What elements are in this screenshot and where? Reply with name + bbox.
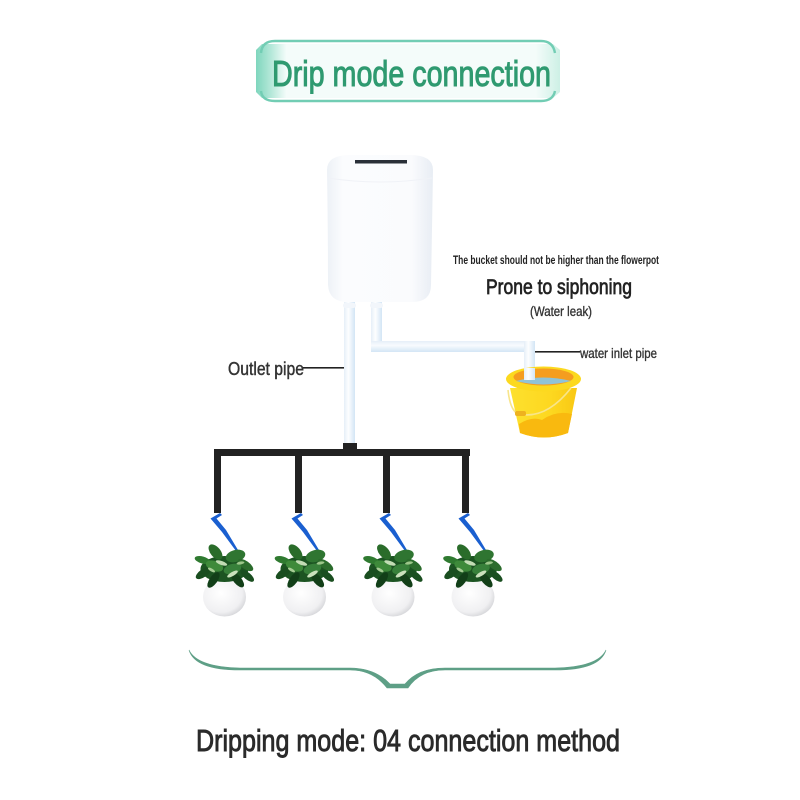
potted plant 2 [274, 542, 336, 616]
drip stake 3 [380, 513, 407, 551]
outlet pipe leader line [303, 367, 344, 369]
drip stake 4 [458, 513, 486, 551]
water leak note: (Water leak) [530, 303, 592, 319]
curly brace [189, 650, 606, 688]
inlet pipe label: water inlet pipe [579, 345, 657, 361]
bottom caption: Dripping mode: 04 connection method [196, 723, 620, 758]
bucket warning note: The bucket should not be higher than the flowerpot [453, 253, 659, 267]
potted plant 3 [362, 542, 424, 616]
outlet pipe label: Outlet pipe [228, 359, 304, 379]
title text: Drip mode connection [272, 53, 551, 94]
black distribution tubing [214, 443, 470, 513]
water inlet pipe [370, 302, 535, 371]
siphoning heading: Prone to siphoning [486, 276, 632, 299]
outlet pipe [343, 302, 356, 445]
water tank [327, 155, 433, 302]
potted plant 4 [442, 542, 504, 616]
inlet pipe leader line [535, 351, 580, 353]
drip stake 1 [210, 513, 238, 551]
drip stake 2 [292, 513, 319, 551]
potted plant 1 [194, 542, 256, 616]
bucket [506, 366, 581, 438]
tank display [355, 160, 407, 164]
title badge [256, 41, 560, 101]
